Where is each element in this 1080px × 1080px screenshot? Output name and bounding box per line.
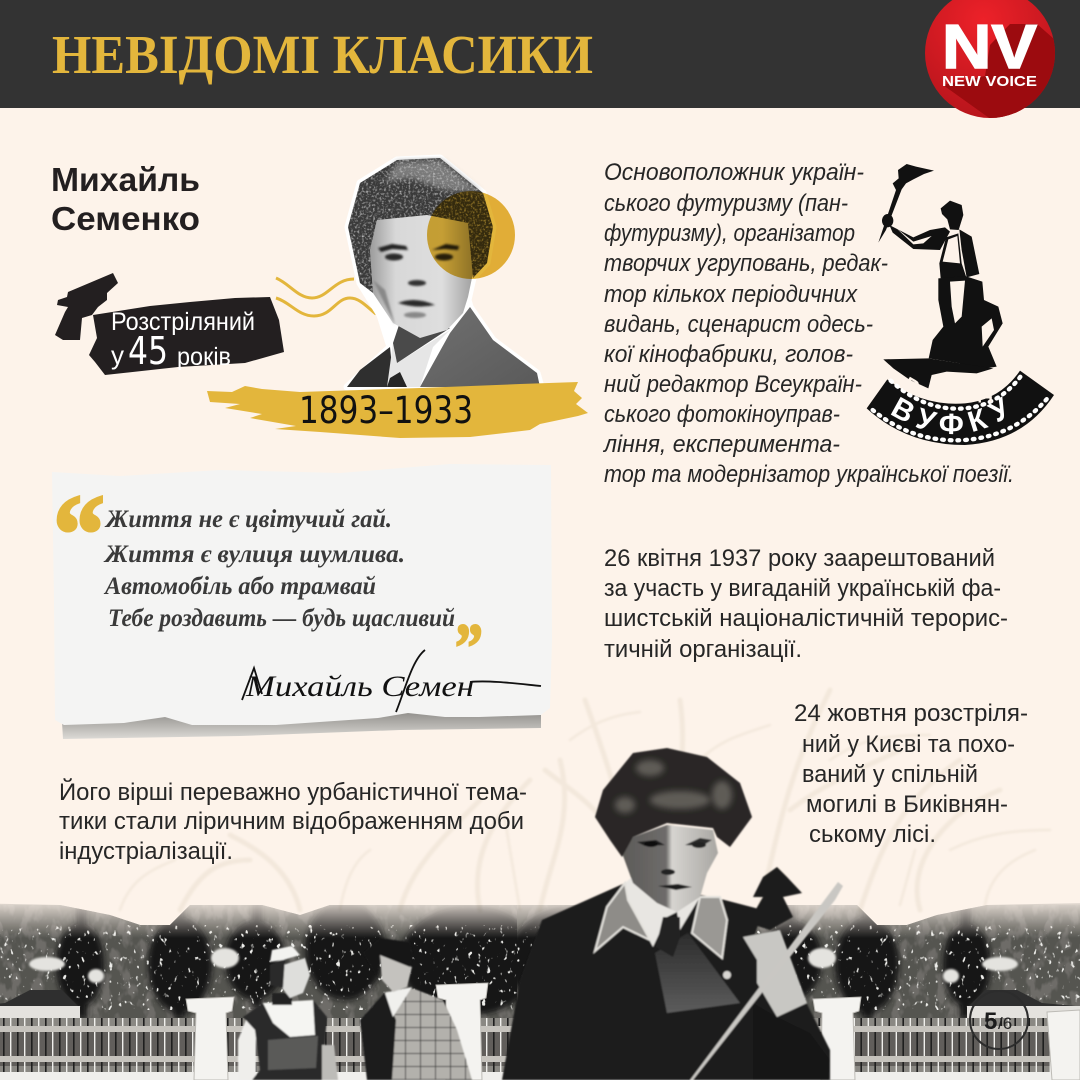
italic biography paragraph: ського фотокіноуправ- (604, 401, 840, 428)
icon: VUFKU blacksmith emblem (866, 164, 1054, 445)
logo: New Voice: NEW VOICE (942, 73, 1037, 90)
text: execution: могилі в Биківнян- (806, 791, 1008, 818)
icon: VUFKU blacksmith emblem: Д (978, 382, 992, 403)
badge: shot at 45: у (111, 340, 124, 370)
name heading: Михайль (51, 161, 200, 198)
brush stroke with dates: 1893–1933 (299, 389, 473, 432)
text: execution (794, 700, 1028, 848)
yellow sun circle (427, 191, 515, 279)
italic biography paragraph: тор та модернізатор української поезії. (604, 461, 1014, 488)
text: execution: ний у Києві та похо- (802, 731, 1015, 758)
italic biography paragraph: ського футуризму (пан- (604, 190, 848, 217)
badge: shot at 45: років (177, 343, 231, 371)
text: urban poems: Його вірші переважно урбаністичної тема- (59, 778, 527, 806)
photo: young man with violin (502, 748, 843, 1080)
page indicator 5/6: /6 (998, 1014, 1012, 1033)
page indicator 5/6: 5 (984, 1008, 997, 1035)
brush stroke with dates (207, 382, 588, 438)
text: urban poems: індустріалізації. (59, 838, 233, 865)
title: НЕВІДОМІ КЛАСИКИ (52, 24, 593, 85)
page indicator 5/6 (970, 991, 1028, 1049)
italic biography paragraph: ління, експеримента- (602, 431, 840, 458)
text: execution: ському лісі. (809, 821, 936, 848)
badge: shot at 45 (89, 297, 284, 375)
signature (242, 650, 541, 712)
badge: shot at 45: Розстріляний (111, 308, 255, 336)
name heading: Семенко (51, 200, 200, 237)
icon: VUFKU blacksmith emblem: ВУФКУ (890, 396, 1004, 434)
poem text: Тебе роздавить — будь щасливий (108, 605, 455, 632)
name heading (51, 161, 200, 237)
italic biography paragraph: творчих угруповань, редак- (604, 250, 888, 277)
text: arrest: тичній організації. (604, 636, 802, 663)
torn paper quote panel (52, 464, 552, 725)
poem text: Життя є вулиця шумлива. (103, 541, 405, 568)
text: arrest: шистській націоналістичній терорис- (604, 605, 1008, 632)
photo: woman in dress (238, 946, 338, 1080)
quote mark: opening: “ (53, 473, 105, 597)
italic biography paragraph: футуризму), організатор (604, 220, 855, 247)
bottom photo: park with fence, mirrored on both sides (0, 893, 1080, 1080)
text: urban poems: тики стали ліричним відображенням доби (59, 808, 524, 835)
italic biography paragraph: видань, сценарист одесь- (604, 311, 873, 338)
text: execution: ваний у спільній (802, 761, 978, 788)
italic biography paragraph (602, 159, 1014, 488)
poem text: Автомобіль або трамвай (103, 573, 376, 600)
signature: Михайль Семен (245, 670, 474, 703)
portrait: Semenko (347, 158, 541, 387)
wavy decorative lines (276, 278, 376, 316)
text: arrest: за участь у вигаданій українській фа- (604, 575, 1001, 602)
fence posts (186, 983, 1080, 1080)
text: arrest (604, 545, 1008, 663)
logo: New Voice: NV (942, 13, 1037, 82)
icon: VUFKU blacksmith emblem: В (899, 373, 924, 400)
text: execution: 24 жовтня розстріля- (794, 700, 1028, 727)
text: urban poems (59, 778, 527, 865)
poem text (103, 506, 455, 632)
icon: revolver (55, 273, 118, 340)
quote mark: closing: ” (455, 609, 483, 685)
poem text: Життя не є цвітучий гай. (104, 506, 392, 533)
italic biography paragraph: тор кількох періодичних (604, 281, 858, 308)
text: arrest: 26 квітня 1937 року заарештований (604, 545, 995, 572)
background: pale bare trees (120, 690, 1050, 910)
paper shadow (62, 710, 541, 739)
photo: man in knit sweater (360, 938, 472, 1080)
italic biography paragraph: Основоположник україн- (604, 159, 864, 186)
logo: New Voice (925, 0, 1062, 120)
icon: VUFKU blacksmith emblem: 9 (957, 382, 968, 403)
italic biography paragraph: ний редактор Всеукраїн- (604, 371, 862, 398)
italic biography paragraph: кої кінофабрики, голов- (604, 341, 853, 368)
header bar (0, 0, 1080, 108)
badge: shot at 45: 45 (128, 329, 168, 373)
